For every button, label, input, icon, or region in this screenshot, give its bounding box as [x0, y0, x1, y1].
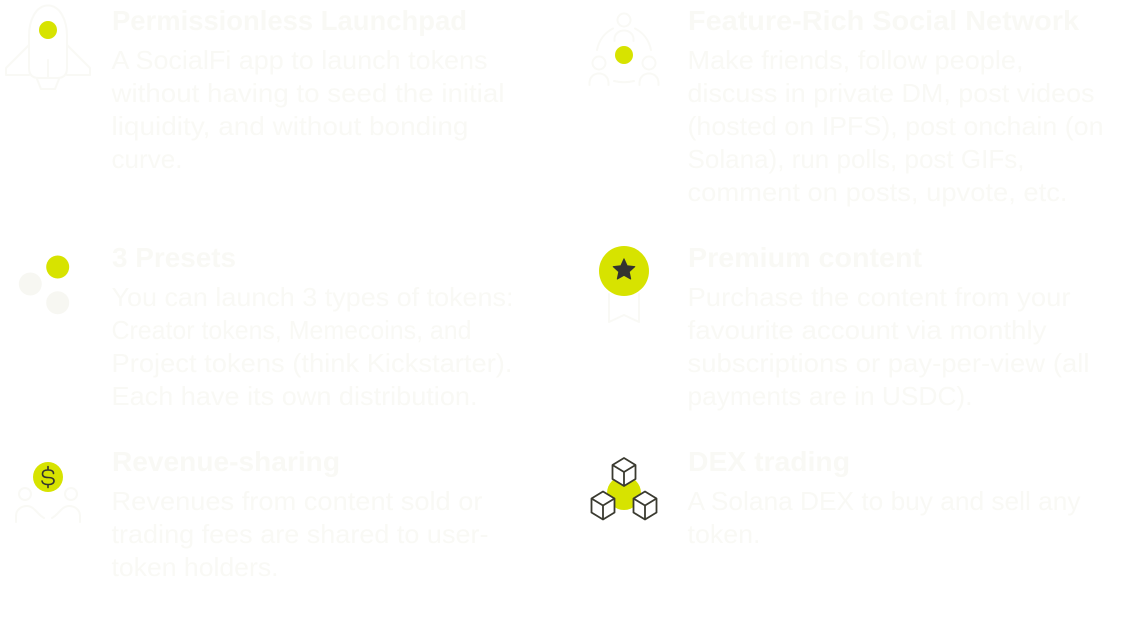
- heading: 3 presets: 3 Presets: [112, 242, 236, 273]
- panel: feature-rich social network: [590, 5, 1104, 207]
- text block: launchpad description: without having to seed the initial: [110, 78, 505, 108]
- text block: launchpad description: curve.: [112, 144, 182, 174]
- text block: social network description: discuss in private DM, post videos: [688, 78, 1094, 108]
- text block: social network description: (hosted on IPFS), post onchain (on: [688, 111, 1104, 141]
- text block: premium description: [688, 282, 1090, 411]
- heading: premium content: Premium content: [688, 242, 922, 273]
- text block: presets description: You can launch 3 types of tokens:: [112, 282, 514, 312]
- text block: social network description: Make friends, follow people,: [688, 45, 1024, 75]
- heading: revenue-sharing: Revenue-sharing: [112, 446, 340, 477]
- text block: premium description: payments are in USDC).: [688, 381, 972, 411]
- text block: presets description: Creator tokens, Memecoins, and: [112, 315, 472, 345]
- icon: medal: [599, 246, 649, 322]
- text block: revenue description: Revenues from content sold or: [112, 486, 483, 516]
- panel: revenue-sharing: [16, 446, 488, 582]
- text block: premium description: Purchase the content from your: [688, 282, 1071, 312]
- icon: blockchain cubes: [592, 458, 656, 520]
- text block: social network description: Solana), run polls, post GIFs,: [688, 144, 1024, 174]
- heading: feature-rich social network: Feature-Rich Social Network: [688, 5, 1079, 36]
- panel: premium content: [599, 242, 1090, 411]
- icon: coin and people: [16, 462, 80, 522]
- text block: revenue description: [112, 486, 488, 582]
- text block: revenue description: token holders.: [112, 552, 278, 582]
- text block: presets description: Project tokens (think Kickstarter).: [112, 348, 512, 378]
- text block: dex description: token.: [688, 519, 760, 549]
- text block: presets description: [112, 282, 514, 411]
- icon: three dots: [19, 256, 69, 314]
- text block: premium description: favourite account via monthly: [688, 315, 1046, 345]
- text block: social network description: comment on posts, upvote, etc.: [688, 177, 1068, 207]
- text block: launchpad description: liquidity, and without bonding: [112, 111, 468, 141]
- text block: dex description: [688, 486, 1080, 549]
- panel: permissionless launchpad: [6, 5, 505, 174]
- text block: launchpad description: [110, 45, 505, 174]
- text block: premium description: subscriptions or pay-per-view (all: [688, 348, 1090, 378]
- heading: permissionless launchpad: Permissionless Launchpad: [112, 5, 467, 36]
- text block: revenue description: trading fees are shared to user-: [112, 519, 488, 549]
- icon: community: [590, 14, 658, 85]
- text block: launchpad description: A SocialFi app to launch tokens: [112, 45, 488, 75]
- text block: presets description: Each have its own distribution.: [112, 381, 477, 411]
- panel: dex trading: [592, 446, 1080, 549]
- panel: 3 presets: [19, 242, 514, 411]
- icon: rocket: [6, 6, 90, 89]
- text block: social network description: [688, 45, 1104, 207]
- text block: dex description: A Solana DEX to buy and sell any: [688, 486, 1080, 516]
- heading: dex trading: DEX trading: [688, 446, 850, 477]
